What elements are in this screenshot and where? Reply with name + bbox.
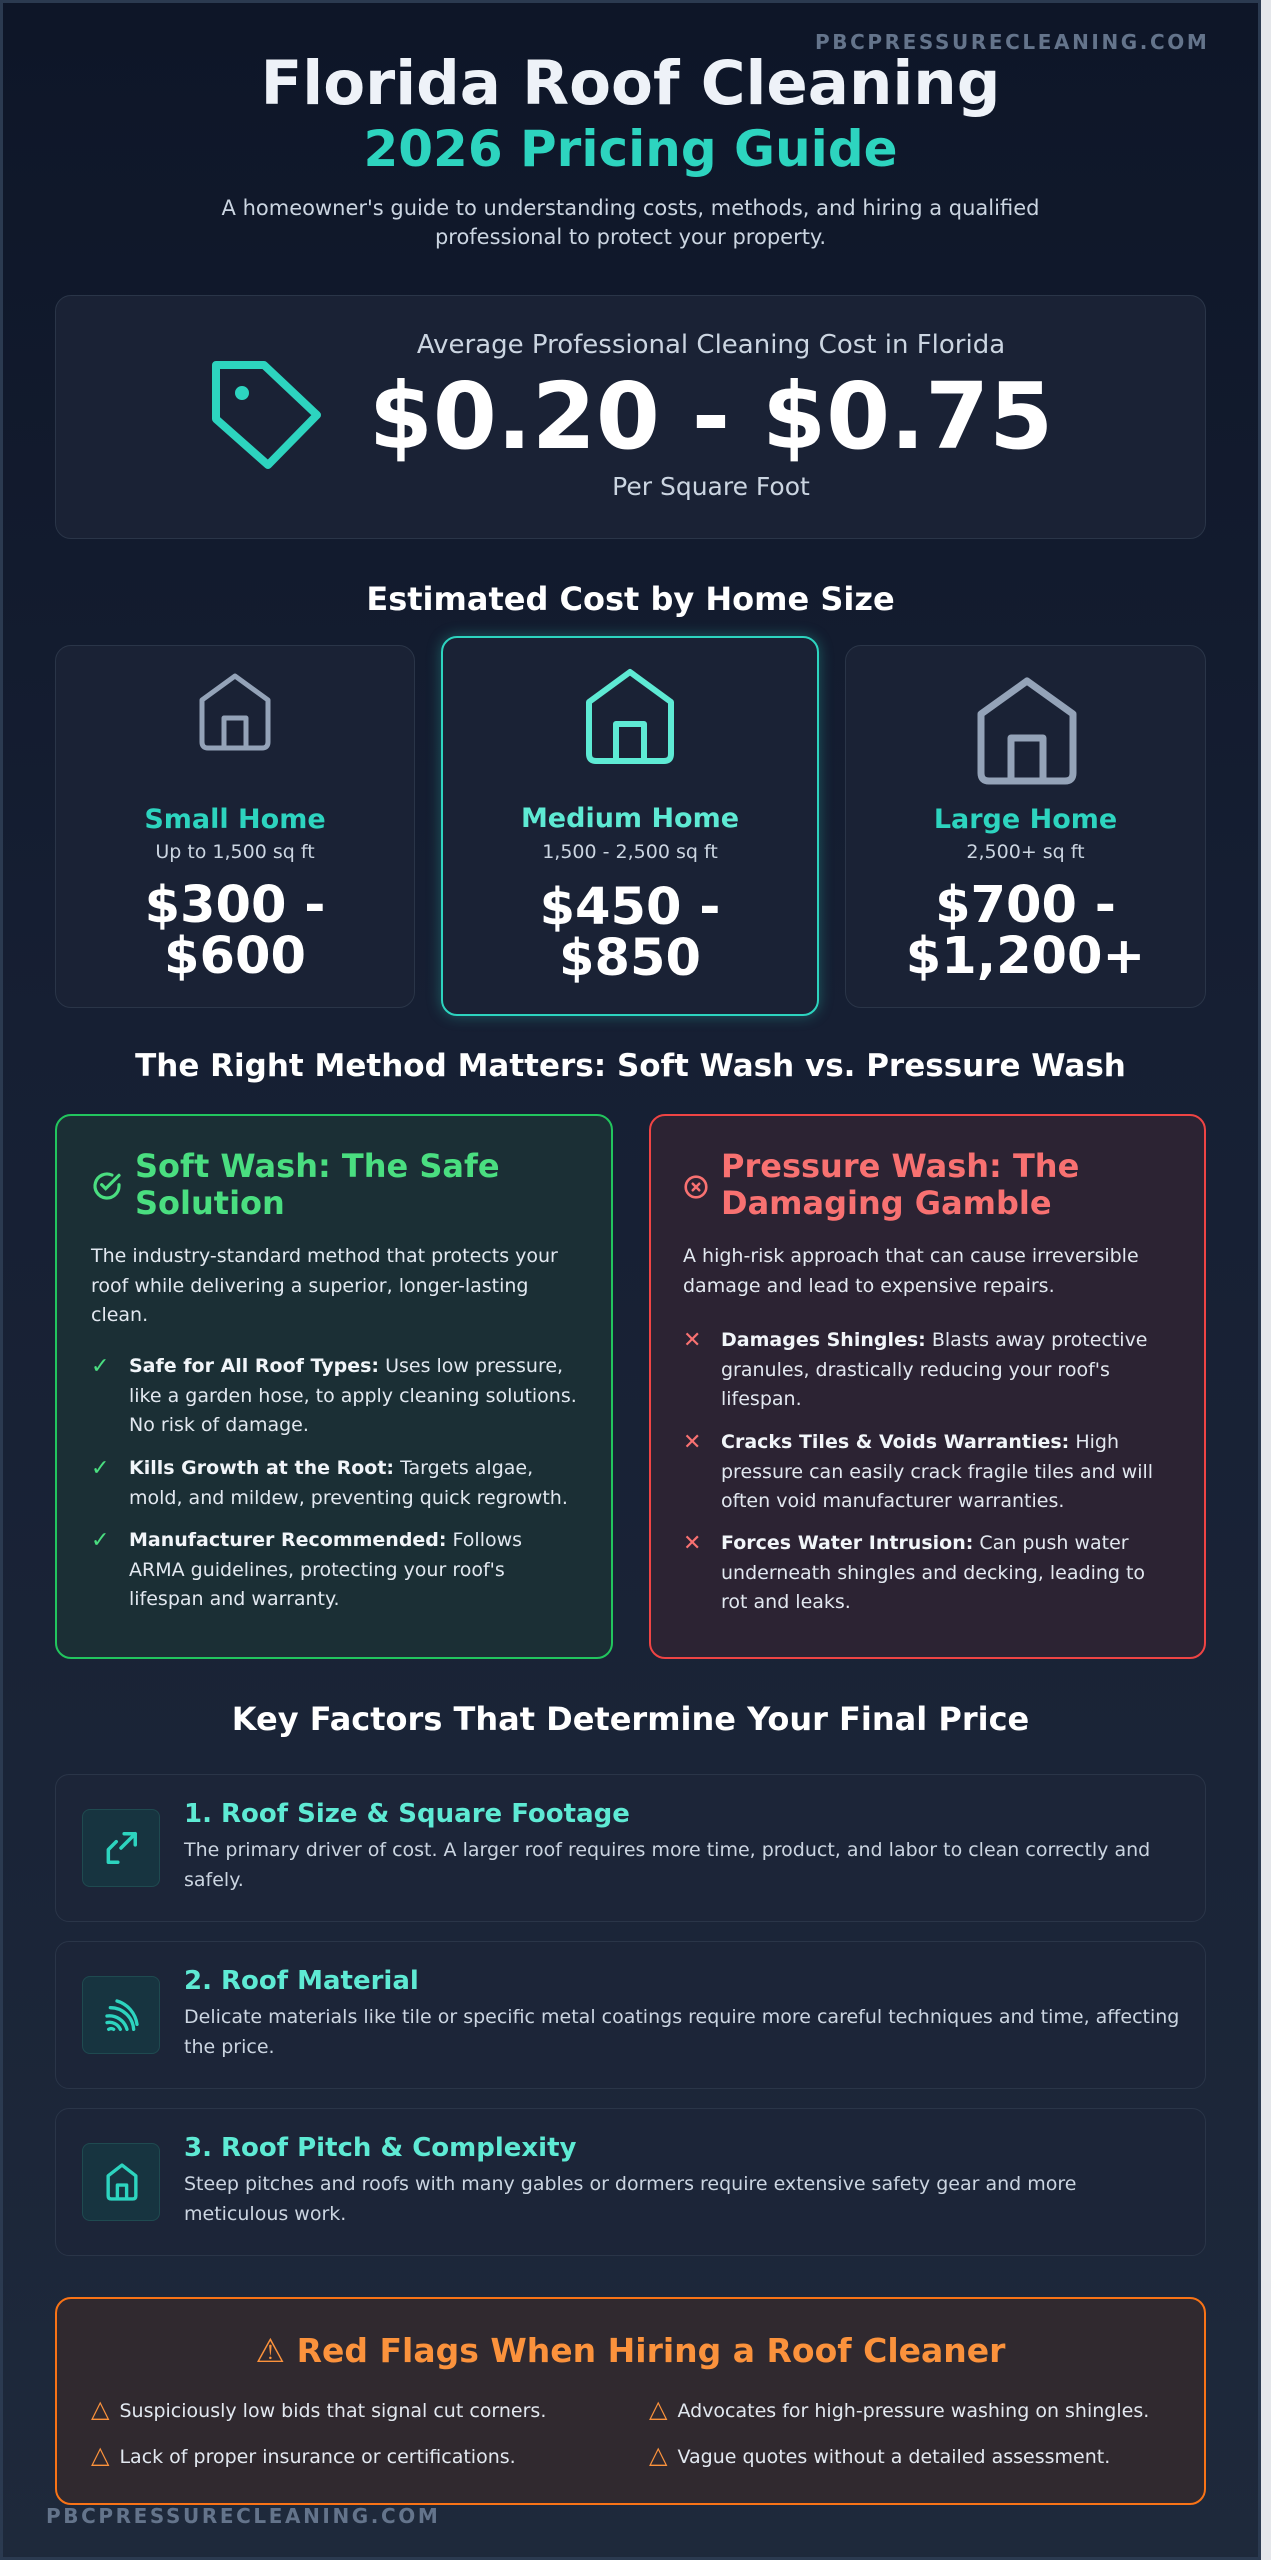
bullet list: pressure wash: Cracks Tiles & Voids Warranties: High pressure can easily crack fragile tiles and will often void manufacturer warranties.	[721, 1431, 1153, 1512]
icon: house medium	[586, 668, 674, 764]
icon: x circle	[684, 1175, 708, 1199]
heading: home size: Estimated Cost by Home Size	[366, 580, 895, 618]
panel: soft wash	[55, 1114, 613, 1659]
intro text	[222, 196, 1039, 249]
cost label: Average Professional Cleaning Cost in Florida	[417, 330, 1005, 360]
factor: roof pitch: Steep pitches and roofs with many gables or dormers require extensive safety gear and more meticulous work.	[184, 2173, 1076, 2225]
soft wash title: Solution	[135, 1184, 285, 1222]
title: Florida Roof Cleaning	[261, 48, 1000, 119]
icon: layers	[82, 1976, 160, 2054]
red flags title: ⚠ Red Flags When Hiring a Roof Cleaner	[256, 2331, 1005, 2370]
icon: house large	[978, 677, 1076, 784]
bullet list: pressure wash	[683, 1328, 1153, 1613]
pressure wash title	[721, 1147, 1079, 1222]
red flag items: △ Advocates for high-pressure washing on shingles.	[649, 2395, 1149, 2423]
bullet list: pressure wash: ✕	[683, 1531, 701, 1556]
panel: medium home: Medium Home	[521, 803, 739, 834]
factor: roof size: 1. Roof Size & Square Footage	[184, 1799, 630, 1829]
bullet list: soft wash: Kills Growth at the Root: Targets algae, mold, and mildew, preventing quick regrowth.	[129, 1457, 568, 1508]
red flag items	[91, 2395, 1149, 2469]
red flag items: △ Suspiciously low bids that signal cut corners.	[91, 2395, 546, 2423]
soft wash title: Soft Wash: The Safe	[135, 1147, 500, 1185]
panel: medium home: 1,500 - 2,500 sq ft	[542, 841, 718, 863]
heading: method: The Right Method Matters: Soft Wash vs. Pressure Wash	[135, 1048, 1126, 1084]
factor: roof material: Delicate materials like tile or specific metal coatings require more careful techniques and time, affecting the price.	[184, 2006, 1179, 2058]
icon: price tag	[212, 361, 321, 469]
panel: large home: $1,200+	[906, 927, 1145, 986]
watermark top: PBCPRESSURECLEANING.COM	[815, 30, 1209, 54]
intro text: A homeowner's guide to understanding costs, methods, and hiring a qualified	[222, 196, 1039, 220]
pressure wash title: Damaging Gamble	[721, 1184, 1052, 1222]
panel: medium home: $450 -	[540, 878, 720, 937]
panel: medium home: $850	[559, 929, 701, 988]
panel: large home: $700 -	[935, 876, 1116, 935]
panel: small home	[55, 645, 415, 1008]
bullet list: pressure wash: Forces Water Intrusion: Can push water underneath shingles and decking, leading to rot and leaks.	[721, 1532, 1145, 1613]
pressure wash description: A high-risk approach that can cause irreversible damage and lead to expensive repairs.	[683, 1245, 1139, 1296]
factor: roof material	[55, 1941, 1206, 2089]
heading: key factors: Key Factors That Determine Your Final Price	[232, 1700, 1029, 1738]
soft wash description: The industry-standard method that protects your roof while delivering a superior, longer-lasting clean.	[91, 1245, 558, 1326]
panel: pressure wash	[649, 1114, 1206, 1659]
panel: large home: Large Home	[934, 804, 1117, 835]
big price: $0.20 - $0.75	[369, 363, 1053, 470]
icon: check circle	[93, 1172, 121, 1200]
factor: roof material: 2. Roof Material	[184, 1966, 419, 1996]
red flag items: △ Vague quotes without a detailed assessment.	[649, 2441, 1110, 2469]
bullet list: soft wash: ✓	[91, 1456, 109, 1481]
bullet list: soft wash: ✓	[91, 1354, 109, 1379]
bullet list: soft wash: Manufacturer Recommended: Follows ARMA guidelines, protecting your roof's lifespan and warranty.	[129, 1529, 522, 1610]
factor: roof pitch: 3. Roof Pitch & Complexity	[184, 2133, 576, 2163]
panel: medium home	[441, 636, 819, 1016]
factor: roof size: The primary driver of cost. A larger roof requires more time, product, and labor to clean correctly and safely.	[184, 1839, 1150, 1891]
per square foot: Per Square Foot	[612, 472, 810, 501]
panel: small home: $600	[164, 927, 306, 986]
panel: small home: Up to 1,500 sq ft	[155, 841, 315, 863]
panel: average cost	[55, 295, 1206, 539]
pressure wash title: Pressure Wash: The	[721, 1147, 1079, 1185]
panel: large home	[845, 645, 1206, 1008]
bullet list: soft wash	[91, 1354, 577, 1610]
bullet list: soft wash: ✓	[91, 1528, 109, 1553]
icon: house	[82, 2143, 160, 2221]
icon: house small	[200, 674, 270, 750]
intro text: professional to protect your property.	[435, 225, 826, 249]
bullet list: soft wash: Safe for All Roof Types: Uses low pressure, like a garden hose, to apply cleaning solutions. No risk of damage.	[129, 1355, 577, 1436]
bullet list: pressure wash: Damages Shingles: Blasts away protective granules, drastically reducing your roof's lifespan.	[721, 1329, 1148, 1410]
bullet list: pressure wash: ✕	[683, 1430, 701, 1455]
soft wash title	[135, 1147, 500, 1222]
factor: roof size	[55, 1774, 1206, 1922]
red flag items: △ Lack of proper insurance or certifications.	[91, 2441, 516, 2469]
panel: large home: 2,500+ sq ft	[966, 841, 1085, 863]
panel: small home: $300 -	[145, 876, 325, 935]
subtitle: 2026 Pricing Guide	[363, 120, 898, 178]
factor: roof pitch	[55, 2108, 1206, 2256]
panel: small home: Small Home	[144, 804, 326, 835]
panel: red flags	[55, 2297, 1206, 2505]
bullet list: pressure wash: ✕	[683, 1328, 701, 1353]
icon: expand arrow	[82, 1809, 160, 1887]
watermark bottom: PBCPRESSURECLEANING.COM	[46, 2504, 440, 2528]
